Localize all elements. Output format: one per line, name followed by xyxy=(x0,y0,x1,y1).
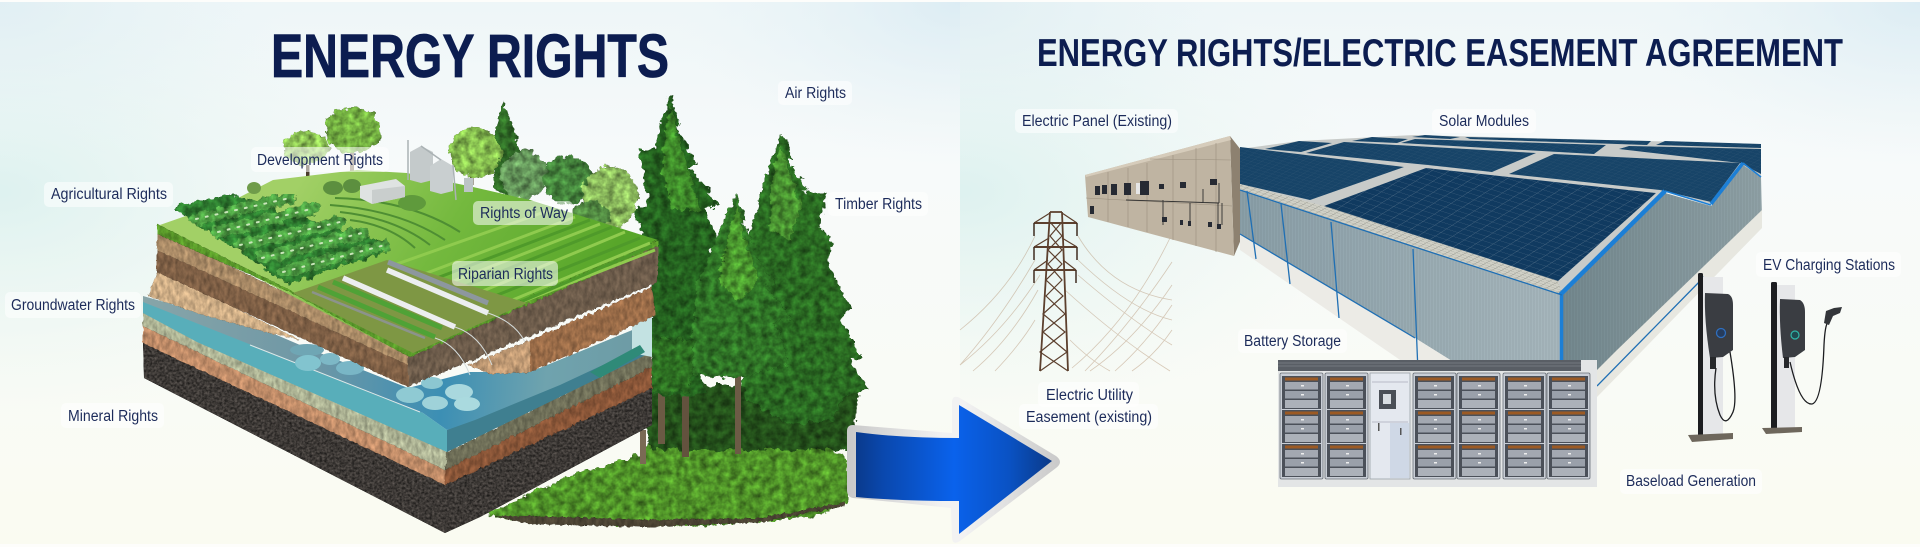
battery switchgear cabinet xyxy=(1370,373,1410,479)
power lines and tower xyxy=(960,212,1172,371)
electric panel xyxy=(1085,136,1242,256)
label: electric panel xyxy=(1015,109,1178,133)
front wall xyxy=(1240,190,1563,376)
conifer trees xyxy=(492,95,868,464)
label: baseload generation xyxy=(1620,469,1762,494)
EV charger 2 xyxy=(1762,282,1842,434)
label: ev charging stations xyxy=(1756,252,1901,277)
tiled walkway xyxy=(1240,184,1563,295)
label: agricultural rights: Agricultural Rights xyxy=(51,186,167,203)
label: groundwater rights xyxy=(5,292,141,318)
label: battery storage: Battery Storage xyxy=(1244,333,1341,350)
label: electric utility easement xyxy=(1019,382,1158,429)
label: mineral rights xyxy=(61,403,164,428)
label: solar modules: Solar Modules xyxy=(1439,113,1529,130)
right wall xyxy=(1563,165,1762,386)
wall base xyxy=(1240,234,1476,376)
label: development rights xyxy=(251,147,389,172)
label: air rights: Air Rights xyxy=(785,85,846,102)
label: rights of way: Rights of Way xyxy=(480,205,568,222)
label: solar modules xyxy=(1432,109,1536,133)
label: mineral rights: Mineral Rights xyxy=(68,408,158,425)
label: riparian rights: Riparian Rights xyxy=(458,266,553,283)
roof base xyxy=(1240,135,1761,295)
label: battery storage xyxy=(1238,329,1347,353)
label: timber rights: Timber Rights xyxy=(835,196,922,213)
label: groundwater rights: Groundwater Rights xyxy=(11,297,135,314)
panel: land illustration xyxy=(143,95,868,533)
crop field xyxy=(173,194,387,284)
label: baseload generation: Baseload Generation xyxy=(1626,473,1756,490)
label: rights of way xyxy=(473,201,573,225)
battery storage xyxy=(1278,360,1597,487)
upper soil block xyxy=(148,232,658,387)
label: electric utility easement: Easement (existing) xyxy=(1026,409,1152,426)
deciduous trees xyxy=(283,107,638,229)
label: electric utility easement: Electric Utility xyxy=(1046,387,1133,404)
label: timber rights xyxy=(828,192,928,216)
rear solar arrays xyxy=(1240,135,1761,202)
label: ev charging stations: EV Charging Stations xyxy=(1763,257,1895,274)
EV charger 1 xyxy=(1688,273,1735,442)
arrow xyxy=(847,397,1060,543)
lower strata block xyxy=(143,296,652,533)
label: riparian rights xyxy=(452,261,558,286)
label: development rights: Development Rights xyxy=(257,152,383,169)
lattice tower xyxy=(1034,212,1077,371)
forest ground xyxy=(487,427,848,527)
front solar array xyxy=(1324,168,1656,281)
label: electric panel: Electric Panel (Existing) xyxy=(1022,113,1172,130)
warehouse with solar modules xyxy=(1240,135,1762,397)
label: air rights xyxy=(778,81,852,105)
blue trim xyxy=(1240,163,1761,386)
title: energy rights: ENERGY RIGHTS xyxy=(271,22,669,90)
grass surface xyxy=(157,170,658,357)
power lines xyxy=(960,236,1172,371)
label: agricultural rights xyxy=(44,182,173,207)
water stones xyxy=(290,344,480,411)
silos and barn xyxy=(360,140,473,204)
irrigation field xyxy=(293,260,527,375)
